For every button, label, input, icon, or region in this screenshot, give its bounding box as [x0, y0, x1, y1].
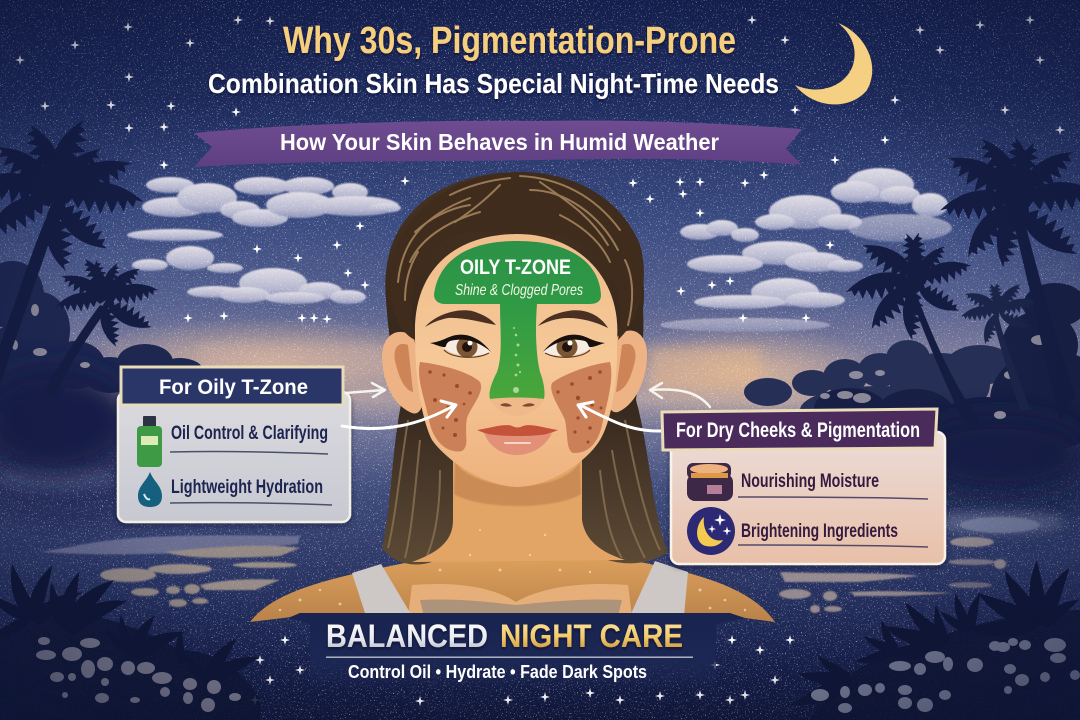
tree highlights [12, 304, 1049, 419]
left cheek pigmentation [419, 362, 481, 451]
icon: moon and stars [687, 507, 735, 555]
hair lower strands [388, 420, 660, 560]
shoulders and chest [250, 460, 775, 622]
treeline right [744, 283, 1080, 495]
neck shadow [454, 462, 581, 506]
arrow to left cheek [342, 401, 456, 428]
card body [118, 392, 350, 522]
clouds left [127, 177, 401, 304]
title line 2: Combination Skin Has Special Night-Time Needs [208, 68, 779, 99]
item: lightweight hydration: Lightweight Hydration [171, 477, 323, 498]
right eye [543, 335, 605, 358]
hair top with strands [390, 172, 644, 340]
left ear [382, 332, 423, 414]
icon: water drop [138, 472, 162, 507]
card header [121, 367, 343, 405]
item: brightening ingredients: Brightening Ingredients [741, 521, 898, 542]
foreground plants left [0, 564, 261, 720]
crescent moon [795, 23, 872, 104]
footer subtitle: Control Oil • Hydrate • Fade Dark Spots [348, 662, 647, 682]
face [415, 234, 617, 487]
left card [118, 367, 350, 522]
footer heading gold: NIGHT CARE [500, 618, 683, 654]
footer heading white: BALANCED [326, 618, 488, 654]
nose highlight [513, 327, 521, 393]
arrow to right cheek [578, 402, 662, 431]
left tank-top strap [352, 564, 412, 616]
T-zone heading: OILY T-ZONE [460, 256, 571, 279]
water streaks right [779, 517, 1040, 613]
arrow to right ear [650, 383, 710, 407]
palm tree small left [42, 255, 160, 395]
neck over hair [412, 455, 625, 562]
banner ribbon [194, 121, 802, 167]
icon: cream jar [687, 463, 733, 501]
water streaks left [40, 535, 300, 607]
right ear [609, 330, 647, 412]
treeline left [0, 261, 204, 475]
hair back [382, 172, 668, 564]
left eye [430, 335, 491, 358]
title [208, 20, 779, 99]
nose tip [490, 398, 544, 416]
palm tree large right [938, 132, 1080, 420]
lips [477, 425, 558, 455]
skin speckles [279, 529, 746, 611]
footer band [288, 613, 745, 690]
right cheek pigmentation [551, 362, 611, 453]
palm tree large left [0, 114, 145, 385]
clouds right [660, 168, 952, 332]
arrow to left ear [346, 383, 385, 397]
banner text: How Your Skin Behaves in Humid Weather [280, 129, 719, 155]
oily T-zone [434, 241, 601, 399]
right tank-top strap [630, 561, 688, 616]
left eyebrow [425, 310, 496, 327]
card body [671, 432, 945, 564]
icon: green bottle [137, 416, 162, 467]
card header: For Dry Cheeks & Pigmentation [676, 419, 920, 442]
palm tree small right [959, 280, 1038, 410]
card header [662, 409, 937, 450]
right card [662, 409, 945, 564]
palm tree medium right [843, 231, 985, 430]
right eyebrow [538, 310, 608, 328]
item: nourishing moisture: Nourishing Moisture [741, 471, 879, 492]
T-zone subtext: Shine & Clogged Pores [455, 282, 583, 299]
card header: For Oily T-Zone [159, 376, 308, 399]
footer divider [326, 656, 693, 658]
title line 1: Why 30s, Pigmentation-Prone [283, 20, 736, 62]
item: oil control: Oil Control & Clarifying [171, 423, 328, 444]
horizon haze [0, 345, 1065, 534]
foreground plants right [788, 560, 1080, 720]
